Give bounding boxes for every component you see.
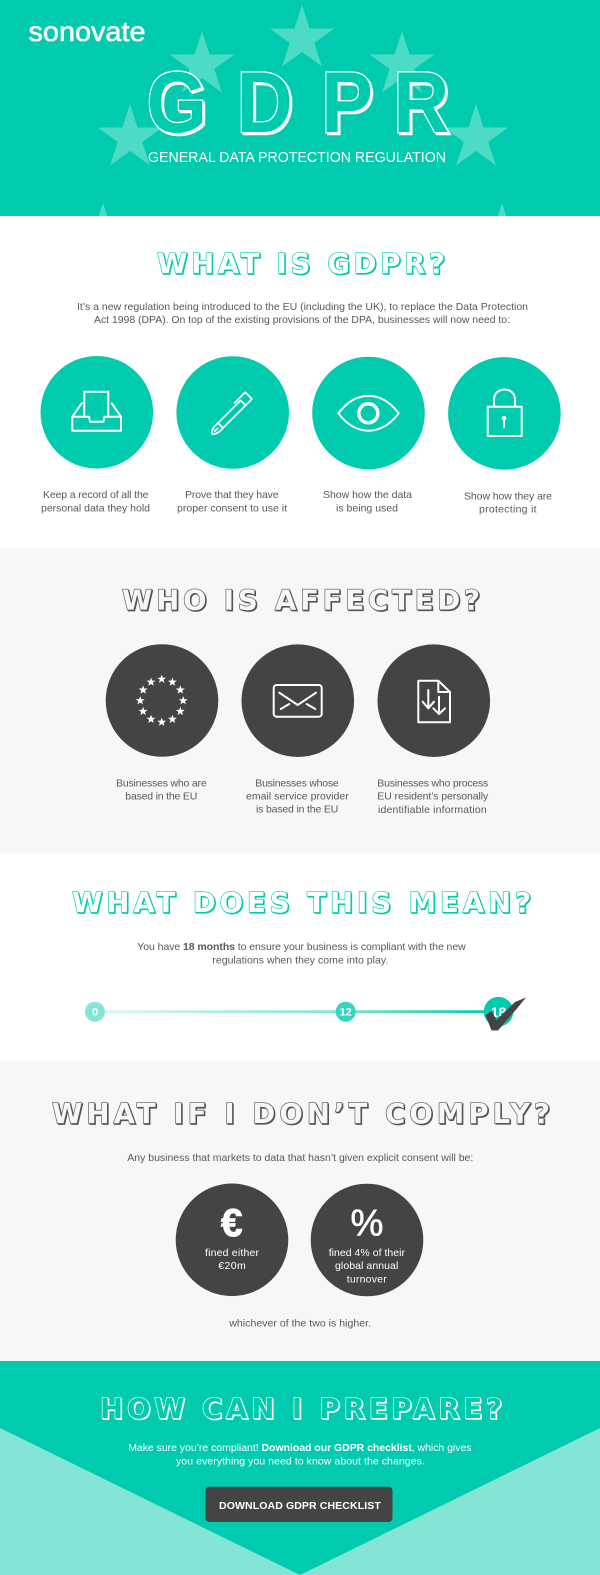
caption: Show how the data (323, 489, 412, 501)
icon: document download (418, 681, 450, 722)
caption: Keep a record of all the (43, 489, 149, 501)
panel: header (0, 0, 600, 264)
icon: eye (338, 396, 399, 431)
caption (205, 1247, 260, 1272)
item: keep a record (41, 356, 153, 514)
caption: identifiable information (378, 804, 487, 816)
icon: check mark (486, 998, 526, 1030)
icon: euro: € (221, 1202, 243, 1245)
right light triangle (300, 1428, 600, 1575)
heading: what if I don't comply: WHAT IF I DON’T COMPLY? (52, 1098, 550, 1130)
caption: EU resident’s personally (377, 790, 489, 802)
text: make sure compliant: you everything you need to know about the changes. (176, 1455, 425, 1467)
text: whichever is higher: whichever of the two is higher. (228, 1318, 371, 1330)
marker: 12: 12 (340, 1007, 352, 1019)
caption: is based in the EU (256, 803, 338, 815)
icon: EU stars (136, 675, 188, 726)
panel: what does this mean (0, 853, 600, 1061)
heading: how can I prepare: HOW CAN I PREPARE? (100, 1393, 502, 1425)
intro text: It’s a new regulation being introduced to the EU (including the UK), to replace the Data Protection (77, 301, 528, 313)
caption (246, 778, 349, 815)
text: 18 months: regulations when they come into play. (212, 954, 388, 966)
caption (116, 778, 207, 802)
item: process personal information (377, 644, 490, 816)
caption: personal data they hold (41, 502, 150, 514)
marker: 0: 0 (92, 1007, 98, 1019)
panel: how can I prepare (0, 1361, 600, 1575)
caption: proper consent to use it (177, 502, 287, 514)
caption: fined 4% of their (329, 1247, 406, 1259)
caption (177, 489, 287, 514)
item: prove consent (176, 356, 289, 514)
logo: sonovate: sonovate (28, 16, 146, 47)
icon: percent: % (351, 1202, 383, 1244)
caption: protecting it (479, 504, 537, 516)
panel: what if I don't comply (0, 1061, 600, 1361)
caption: fined either (205, 1247, 260, 1259)
icon: padlock (488, 389, 522, 436)
caption: email service provider (246, 790, 349, 802)
caption (464, 490, 552, 516)
caption: global annual (335, 1260, 398, 1272)
panel: what is GDPR (0, 216, 600, 548)
button: download checklist: DOWNLOAD GDPR CHECKLIST (219, 1500, 381, 1512)
marker: 18 (484, 997, 513, 1026)
intro text: Act 1998 (DPA). On top of the existing provisions of the DPA, businesses will now need to: (94, 314, 510, 326)
icon: pen (208, 392, 252, 437)
caption: is being used (336, 502, 398, 514)
caption: Businesses who are (116, 778, 207, 790)
marker: 18: 18 (491, 1004, 506, 1020)
icon: envelope (274, 685, 322, 717)
title: GDPR: GDPR (147, 55, 449, 151)
background stars (71, 5, 534, 264)
item: show data use (312, 357, 425, 514)
subtitle: GENERAL DATA PROTECTION REGULATION (148, 149, 446, 166)
fine: 20 million euro (176, 1184, 288, 1296)
timeline (85, 997, 526, 1030)
item: email provider (241, 644, 354, 815)
caption: Businesses who process (377, 778, 488, 790)
heading: what is GDPR: WHAT IS GDPR? (157, 248, 445, 280)
text: 18 months (137, 941, 466, 966)
text: make sure compliant: Make sure you’re compliant! Download our GDPR checklist, which gives (128, 1442, 471, 1454)
caption (41, 489, 150, 514)
caption (323, 489, 412, 514)
heading: who is affected: WHO IS AFFECTED? (122, 584, 480, 616)
item: based in EU (106, 644, 218, 802)
text: 18 months: You have 18 months to ensure your business is compliant with the new (137, 941, 466, 953)
caption: €20m (218, 1260, 246, 1272)
icon: inbox tray (72, 392, 121, 431)
item: show protection (448, 357, 561, 516)
text: make sure compliant (128, 1442, 471, 1467)
marker: 12 (336, 1002, 356, 1022)
caption: turnover (347, 1274, 387, 1286)
caption: Show how they are (464, 490, 552, 502)
caption: Prove that they have (185, 489, 279, 501)
caption: based in the EU (125, 790, 197, 802)
button: download checklist (206, 1487, 392, 1522)
caption: Businesses whose (255, 778, 339, 790)
panel: who is affected (0, 548, 600, 853)
caption (329, 1247, 406, 1286)
text: any business: Any business that markets to data that hasn’t given explicit consent will be: (127, 1152, 473, 1164)
heading: what does this mean: WHAT DOES THIS MEAN? (72, 887, 531, 919)
marker: 0 (85, 1002, 105, 1022)
left light triangle (0, 1428, 300, 1575)
caption (377, 778, 489, 816)
fine: 4 percent turnover (311, 1184, 423, 1296)
intro text (77, 301, 528, 326)
